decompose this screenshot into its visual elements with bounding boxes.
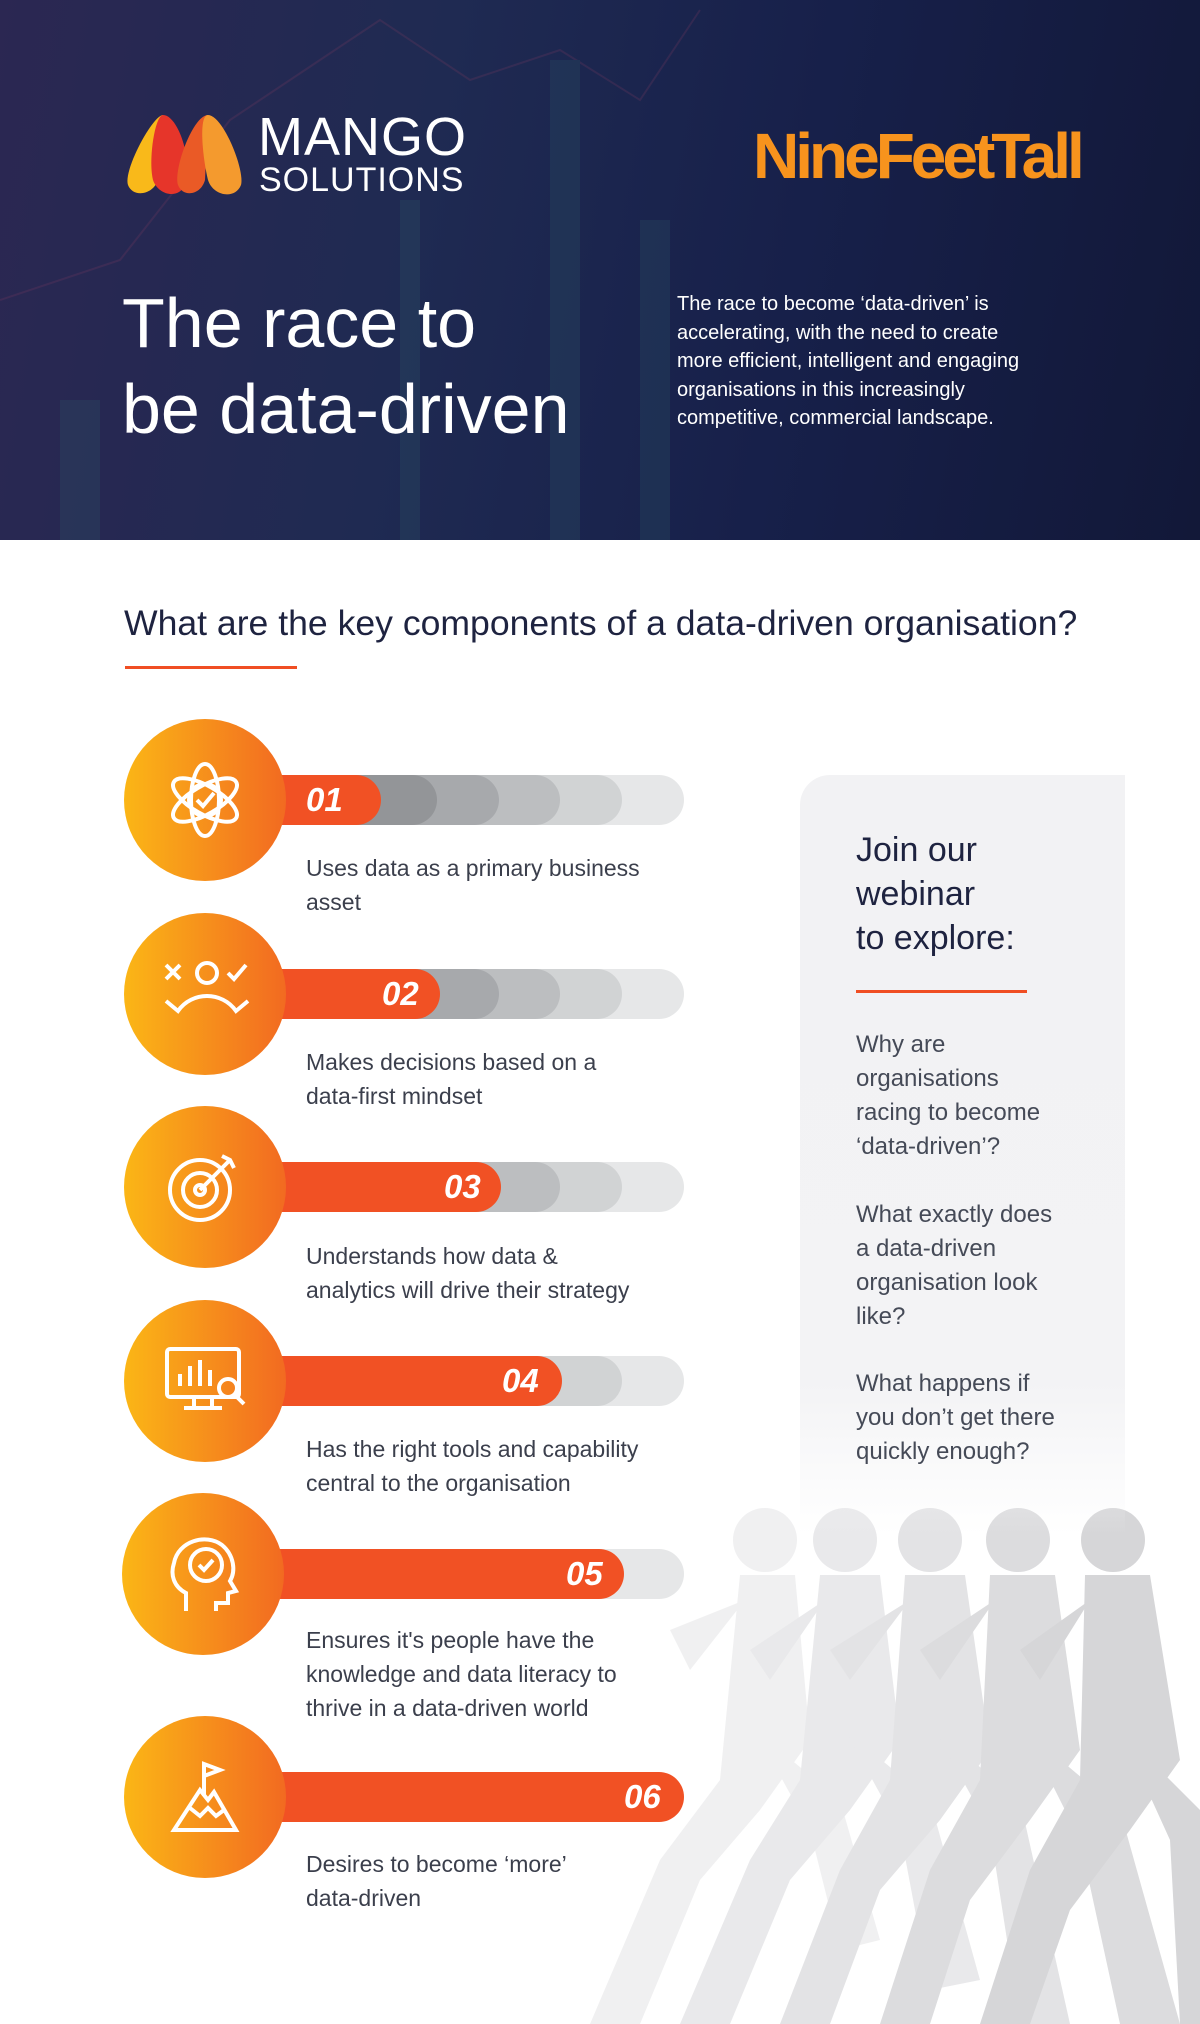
description 05 [306,1627,617,1721]
description 03: analytics will drive their strategy [306,1277,629,1303]
description 06: data-driven [306,1885,421,1911]
intro text: organisations in this increasingly [677,378,965,400]
description 03 [306,1243,630,1303]
description 02 [306,1049,596,1109]
item 05 [122,1493,684,1655]
description 01: Uses data as a primary business [306,855,640,881]
question 3 [856,1370,1055,1465]
description 04: Has the right tools and capability [306,1436,638,1462]
intro text: accelerating, with the need to create [677,322,998,344]
question 2 [856,1201,1052,1330]
panel: webinar [800,775,1125,1535]
description 02: data-first mindset [306,1083,482,1109]
description 01: asset [306,889,361,915]
item 03: 03 [444,1168,481,1205]
description 06: Desires to become ‘more’ [306,1851,567,1877]
intro text: more efficient, intelligent and engaging [677,350,1019,372]
description 04: central to the organisation [306,1470,571,1496]
panel heading: Join our [856,831,977,869]
item 01 [124,719,684,881]
panel heading: to explore: [856,919,1015,957]
question 1: racing to become [856,1099,1040,1126]
logo: Mango Solutions: SOLUTIONS [259,161,464,199]
title: be data-driven [122,370,570,448]
panel heading [856,831,1015,957]
description 04 [306,1436,638,1496]
question 1 [856,1031,1040,1160]
header background [0,0,1200,540]
question 1: organisations [856,1065,999,1092]
question 2: a data-driven [856,1235,996,1262]
description 01 [306,855,640,915]
logo: NineFeetTall: NineFeetTall [753,120,1081,192]
intro text [677,293,1019,429]
title [122,284,570,448]
logo: Mango Solutions [127,107,467,199]
item 02: 02 [382,975,419,1012]
item 06 [124,1716,684,1878]
item 03 [124,1106,684,1268]
intro text: The race to become ‘data-driven’ is [677,293,989,315]
panel heading: webinar [856,875,975,913]
question 1: ‘data-driven’? [856,1133,1000,1160]
description 02: Makes decisions based on a [306,1049,596,1075]
question 3: you don’t get there [856,1404,1055,1431]
item 01: 01 [306,781,343,818]
title: The race to [122,284,476,362]
question 2: organisation look [856,1269,1037,1296]
item 06: 06 [624,1778,661,1815]
question 3: quickly enough? [856,1438,1029,1465]
description 06 [306,1851,567,1911]
item 05: 05 [566,1555,603,1592]
question 2: What exactly does [856,1201,1052,1228]
item 04 [124,1300,684,1462]
section heading: What are the key components of a data-driven organisation? [124,603,1077,643]
intro text: competitive, commercial landscape. [677,407,994,429]
item 04: 04 [502,1362,539,1399]
description 05: Ensures it's people have the [306,1627,594,1653]
question 2: like? [856,1303,905,1330]
description 03: Understands how data & [306,1243,558,1269]
description 05: thrive in a data-driven world [306,1695,589,1721]
description 05: knowledge and data literacy to [306,1661,617,1687]
question 1: Why are [856,1031,945,1058]
logo: Mango Solutions: MANGO [258,107,467,167]
item 02 [124,913,684,1075]
runners silhouettes [590,1508,1200,2024]
question 3: What happens if [856,1370,1029,1397]
